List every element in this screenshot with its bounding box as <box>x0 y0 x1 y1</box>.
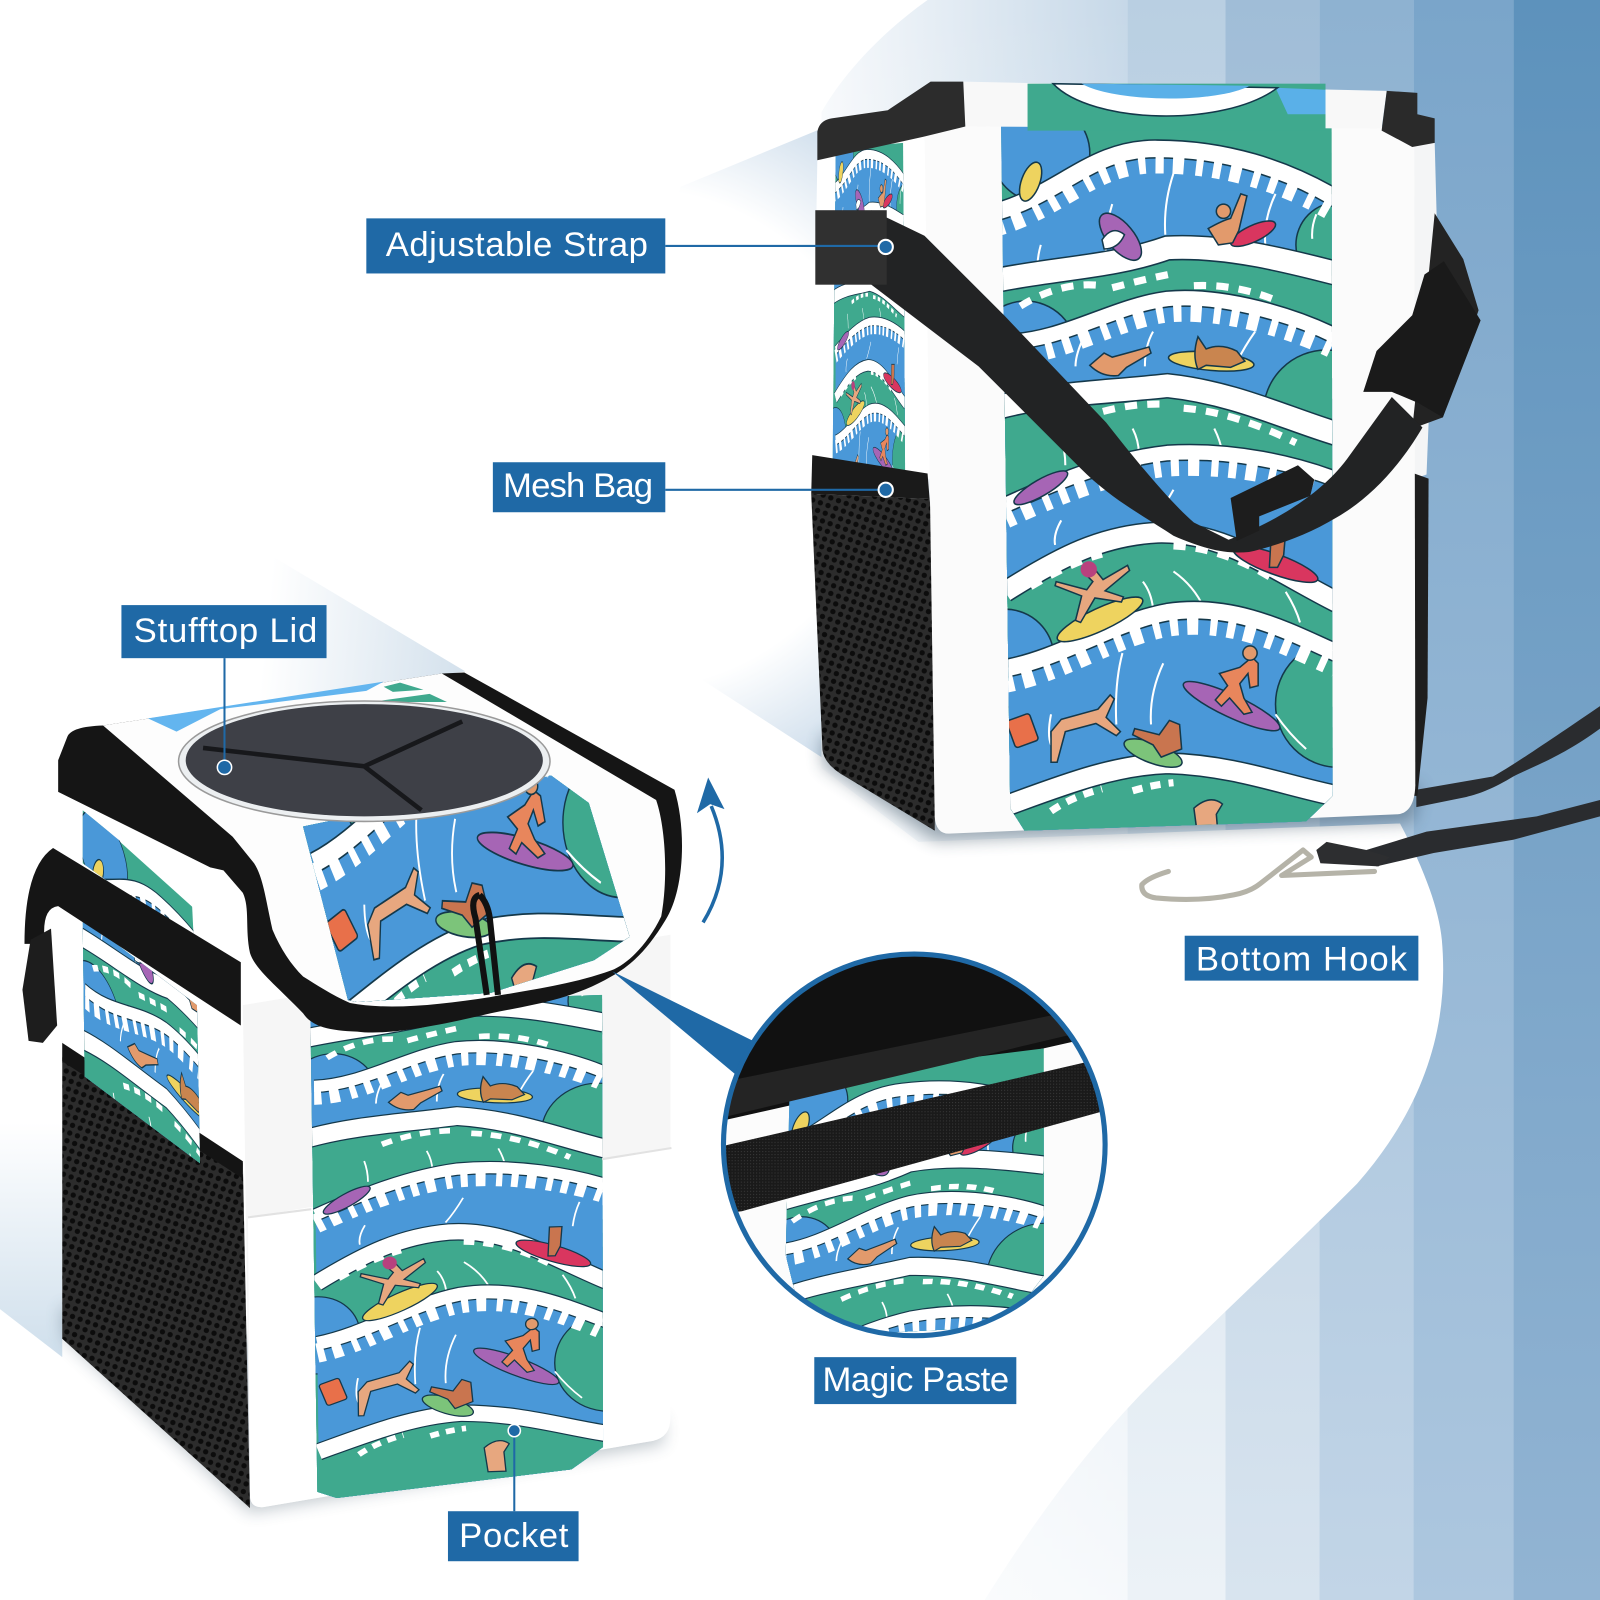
side mesh pocket <box>62 1041 250 1508</box>
velcro strip <box>726 1062 1100 1212</box>
side buckle <box>22 929 57 1043</box>
lid rim <box>58 672 682 1033</box>
strap <box>871 210 1422 552</box>
front pattern <box>310 994 604 1498</box>
side pattern upper <box>82 810 194 934</box>
right side panel <box>1412 143 1437 480</box>
interior lining <box>728 956 1072 1120</box>
label: Mesh Bag: Mesh Bag <box>503 467 653 505</box>
black rim right <box>1382 91 1435 147</box>
label: Adjustable Strap: Adjustable Strap <box>386 226 648 264</box>
magnifier: magic paste detail <box>720 952 1108 1338</box>
bottom hook <box>1142 842 1390 899</box>
side strap band <box>24 848 241 1026</box>
right mesh <box>1412 473 1429 796</box>
background: blue gradient stripes <box>821 0 1600 1600</box>
side release buckle <box>1363 261 1481 417</box>
light beam behind lower bag <box>102 517 465 727</box>
flap pattern <box>303 776 630 1002</box>
label: Bottom Hook: Bottom Hook <box>1196 940 1408 978</box>
label: Pocket: Pocket <box>459 1517 569 1555</box>
left side panel <box>812 127 934 480</box>
front panel <box>243 935 670 1507</box>
upper binding <box>728 1016 1068 1116</box>
bottom shadow <box>822 735 1420 841</box>
magnifier pattern <box>786 1048 1044 1332</box>
slider buckle <box>1231 465 1314 541</box>
side pattern lower <box>82 922 200 1164</box>
side panel <box>59 788 243 1174</box>
label: Stufftop Lid <box>121 605 327 774</box>
drawstring <box>473 895 498 995</box>
front panel <box>924 127 1415 834</box>
stufftop opening <box>179 701 550 821</box>
top flap pattern <box>1028 84 1326 131</box>
front pattern <box>1001 126 1333 831</box>
label: Pocket <box>448 1424 579 1561</box>
arrow: lid opens <box>697 778 724 922</box>
label: Stufftop Lid: Stufftop Lid <box>134 612 317 650</box>
mesh binding <box>62 1043 243 1179</box>
lid surface <box>103 673 665 1006</box>
bottom shadow <box>61 1306 663 1512</box>
pocket front <box>248 1148 671 1507</box>
strap keeper loop <box>815 210 887 285</box>
label: Magic Paste: Magic Paste <box>822 1361 1009 1399</box>
mesh bag pocket <box>811 455 938 831</box>
black rim left <box>817 82 965 160</box>
right strap segment <box>1412 213 1479 429</box>
label: Adjustable Strap <box>366 218 893 273</box>
light beam behind upper bag <box>612 129 821 757</box>
pocket seam <box>248 1148 671 1217</box>
side pattern <box>832 142 906 470</box>
bag: lower view with lid <box>22 118 716 1600</box>
lid top pattern strip <box>148 682 447 732</box>
long strap upper <box>1416 706 1600 807</box>
top flap <box>963 82 1387 129</box>
callout wedge to magnifier <box>612 971 757 1076</box>
white panel <box>726 1042 1103 1154</box>
light beam lower left <box>0 1122 62 1357</box>
long strap lower <box>1366 800 1600 866</box>
bag: upright view <box>811 82 1600 899</box>
label: Mesh Bag <box>493 462 893 512</box>
